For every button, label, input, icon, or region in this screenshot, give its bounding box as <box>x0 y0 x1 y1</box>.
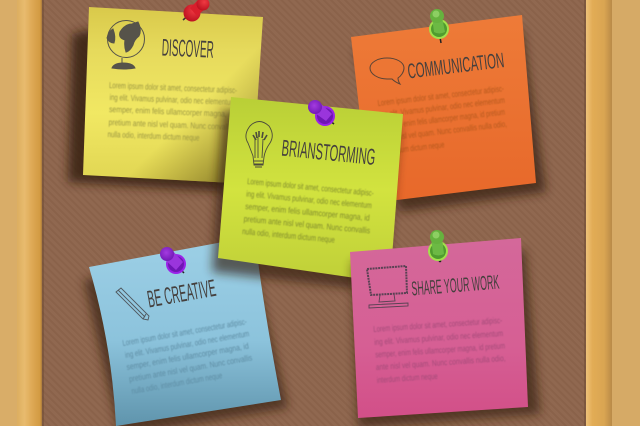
pin: green on orange note <box>429 9 449 43</box>
icon: speech bubble <box>370 58 404 84</box>
body text: discover: pretium ante nisl vel quam. Nunc convallis <box>108 117 234 132</box>
note: discover (yellow) <box>68 7 263 192</box>
body text: brainstorming: Lorem ipsum dolor sit amet, consectetur adipisc- <box>247 176 374 198</box>
body text: be creative: nulla odio, interdum dictum neque <box>131 370 223 396</box>
note: brainstorming (lime green): BRIANSTORMING <box>280 135 377 170</box>
pin: purple on green note <box>308 100 335 126</box>
body text: discover: Lorem ipsum dolor sit amet, consectetur adipisc- <box>109 80 237 95</box>
body text: discover: ing elit. Vivamus pulvinar, odio nec elementum <box>109 92 236 107</box>
pin: red <box>183 0 210 22</box>
icon: monitor <box>367 266 408 308</box>
body text: share your work: Lorem ipsum dolor sit amet, consectetur adipisc- <box>373 315 502 334</box>
body text: communication: ing elit. Vivamus pulvinar, odio nec elementum <box>379 95 505 119</box>
body text: communication: interdum dictum neque <box>386 139 445 156</box>
body text: be creative: semper, enim felis ullamcorper magna, id <box>126 341 250 372</box>
body text: discover <box>107 80 237 143</box>
note: discover (yellow): DISCOVER <box>161 35 214 64</box>
body text: be creative: pretium ante nisl vel quam. Nunc convallis <box>128 352 253 384</box>
body text: brainstorming: semper, enim felis ullamcorper magna, id <box>245 201 370 223</box>
icon: light bulb <box>246 122 272 167</box>
body text: be creative <box>122 316 253 396</box>
note: share your work (pink): SHARE YOUR WORK <box>411 272 500 300</box>
wooden frame: right <box>584 0 640 426</box>
icon: pencil <box>116 288 149 320</box>
body text: brainstorming: nulla odio, interdum dictum neque <box>242 226 336 245</box>
note: be creative (blue): BE CREATIVE <box>145 275 218 313</box>
body text: discover: nulla odio, interdum dictum neque <box>107 129 200 143</box>
body text: communication <box>377 83 507 156</box>
body text: be creative: Lorem ipsum dolor sit amet, consectetur adipisc- <box>122 316 248 348</box>
body text: share your work: semper, enim felis ullamcorper magna, id pretium <box>375 340 505 359</box>
note: brainstorming (lime green) <box>212 97 403 292</box>
body text: brainstorming <box>242 176 374 245</box>
body text: share your work <box>373 315 506 385</box>
wooden frame: left <box>0 0 44 426</box>
body text: be creative: ing elit. Vivamus pulvinar, odio nec elementum <box>124 328 250 360</box>
body text: communication: semper, enim felis ullamcorper magna, id pretium <box>381 107 505 131</box>
pin: green on pink note <box>428 230 448 262</box>
body text: share your work: ing elit. Vivamus pulvinar, odio nec elementum <box>374 328 503 347</box>
note: communication (orange) <box>351 15 546 212</box>
note: be creative (blue) <box>84 236 288 426</box>
body text: brainstorming: ing elit. Vivamus pulvinar, odio nec elementum <box>246 189 372 210</box>
body text: communication: Lorem ipsum dolor sit amet, consectetur adipisc- <box>377 83 504 108</box>
body text: share your work: interdum dictum neque <box>376 371 438 385</box>
icon: globe <box>107 20 144 69</box>
body text: brainstorming: pretium ante nisl vel quam. Nunc convallis <box>243 214 371 235</box>
heading: communication: COMMUNICATION <box>406 49 505 83</box>
body text: discover: semper, enim felis ullamcorper magna, id <box>109 104 234 119</box>
note: share your work (pink) <box>350 238 540 426</box>
body text: communication: ante nisl vel quam. Nunc convallis nulla odio, <box>383 119 507 143</box>
body text: share your work: ante nisl vel quam. Nunc convallis nulla odio, <box>375 353 506 372</box>
pin: purple on blue note <box>160 247 186 274</box>
